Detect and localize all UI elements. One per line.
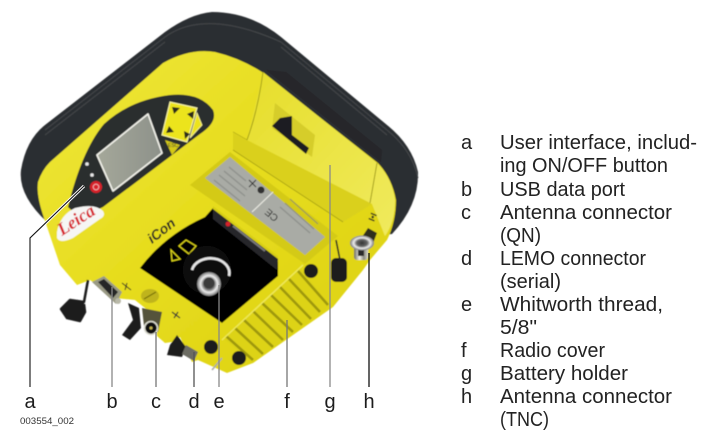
yellow housing (38, 51, 396, 373)
part callout letters: h (363, 391, 375, 413)
legend: LEMO connector (500, 248, 646, 270)
legend: Antenna connector (500, 202, 672, 224)
legend: Battery holder (500, 363, 628, 385)
yellow shoulder bands (233, 132, 372, 222)
iCon lettering: iCon (144, 215, 178, 246)
legend: Whitworth thread, (500, 294, 663, 316)
rating labels: CE (263, 206, 281, 223)
left cap with strap (61, 280, 88, 321)
device illustration (21, 12, 418, 373)
legend: (serial) (500, 271, 561, 293)
legend: Antenna connector (500, 386, 672, 408)
user interface panel (68, 95, 214, 218)
rubber bumper (21, 12, 418, 240)
leader lines b to h (112, 165, 369, 387)
legend: (QN) (500, 225, 541, 247)
legend: d (461, 248, 472, 270)
display (97, 114, 162, 191)
radio cover fins (222, 265, 330, 363)
ESC key (165, 140, 180, 155)
power button (90, 181, 102, 193)
screw recesses (141, 264, 318, 365)
legend: User interface, includ- (500, 132, 697, 154)
LEMO connector d (167, 335, 222, 370)
black antenna plate (140, 206, 278, 323)
QN connector c (122, 303, 180, 340)
legend: f (461, 340, 467, 362)
legend: b (461, 179, 472, 201)
part callout letters: c (151, 391, 161, 413)
part callout letters: d (188, 391, 200, 413)
legend: g (461, 363, 472, 385)
legend: e (461, 294, 472, 316)
battery holder (233, 70, 395, 236)
legend (461, 132, 697, 431)
Whitworth thread mount (183, 246, 231, 296)
legend: USB data port (500, 179, 625, 201)
TNC symbol: I•I (367, 211, 379, 223)
legend: ing ON/OFF button (500, 155, 668, 177)
Leica logo: Leica (52, 200, 99, 240)
figure reference number: 003554_002 (20, 416, 74, 427)
part callout letters: e (213, 391, 225, 413)
navigation keypad: ESC (168, 143, 179, 149)
legend: Radio cover (500, 340, 605, 362)
TNC connector h (350, 228, 377, 260)
legend: a (461, 132, 473, 154)
part callout letters: b (106, 391, 118, 413)
leader line a (30, 186, 84, 387)
rating labels (205, 157, 325, 255)
status LEDs (85, 162, 89, 166)
part callout letters: a (24, 391, 36, 413)
legend: h (461, 386, 472, 408)
USB port b (92, 276, 131, 304)
legend: (TNC) (500, 409, 549, 431)
legend: 5/8" (500, 317, 537, 339)
battery latch slot (272, 103, 315, 157)
part callout letters (24, 391, 375, 413)
legend: c (461, 202, 471, 224)
part callout letters: f (284, 391, 290, 413)
part callout letters: g (324, 391, 336, 413)
knob cap near TNC connector (331, 240, 347, 282)
warning icons (171, 250, 180, 261)
navigation keypad (162, 102, 202, 155)
